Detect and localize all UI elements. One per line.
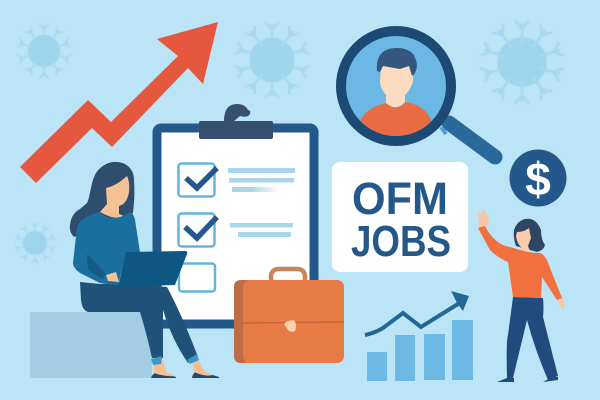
sweater [73,212,140,285]
icon: dollar coin: $ [525,153,551,205]
figure: waving woman [478,208,565,382]
face and neck [100,176,129,218]
hair [70,162,134,237]
face [516,228,531,251]
pants [507,297,558,380]
ankles [153,358,213,376]
checklist lines one [228,168,295,192]
shoes [497,377,558,382]
clipboard clip [199,104,273,139]
lens [341,31,451,141]
chart: rising bars with trend line [365,291,473,381]
checkbox one checked [178,164,217,196]
sweater fold [87,254,106,279]
hands [106,272,119,282]
pants [80,282,198,363]
panel: clipboard checklist [157,104,314,324]
hand and arm skin [478,208,565,309]
clipboard board [157,128,314,324]
figure: woman with laptop on block [30,162,219,378]
arrow: rising red trend [20,22,218,183]
person in lens [358,48,432,140]
handle [449,123,495,157]
seat block [30,312,152,378]
checkbox three empty [179,264,215,292]
shirt [360,102,432,136]
icon: virus top right [481,21,563,103]
orange sweater [478,226,562,300]
hair [514,219,545,252]
panel: OFM JOBS title card [332,162,468,272]
hair [377,48,417,76]
icon: virus top left [17,24,71,78]
checklist lines two [230,223,293,237]
icon: magnifying glass with person [341,31,495,157]
laptop [118,251,187,287]
title text: JOBS: JOBS [351,217,451,266]
trend arrow head [451,291,469,311]
icon: virus lower left [15,223,55,263]
neck and face [380,66,413,107]
cuffs [151,354,199,365]
checkbox two checked [178,214,217,246]
trend line [365,304,458,335]
title text: OFM: OFM [352,173,448,224]
icon: virus top centre [235,23,309,97]
icon: orange briefcase [234,269,344,363]
icon: dollar coin [510,150,566,206]
bars [367,320,473,381]
shoes [151,371,219,378]
